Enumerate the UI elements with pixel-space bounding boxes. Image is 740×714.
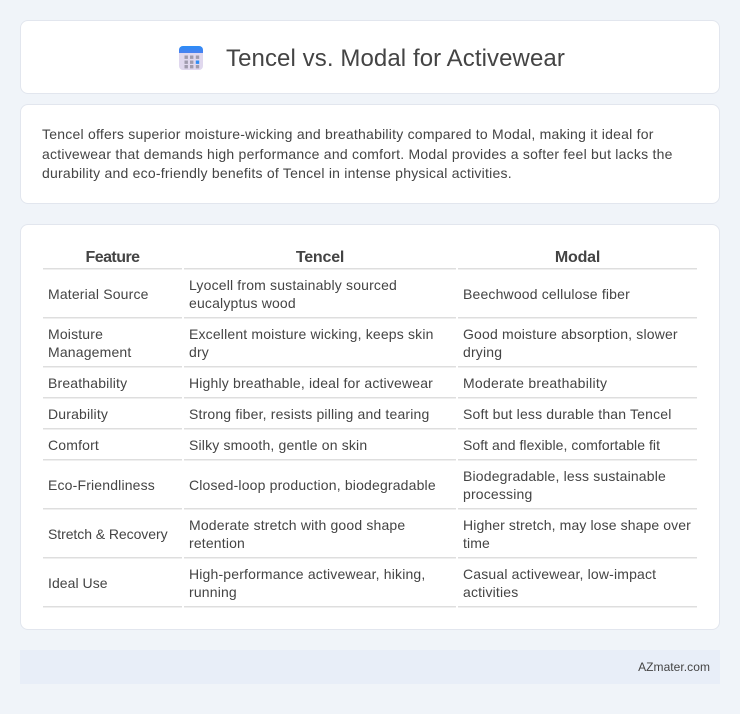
table header bbox=[86, 249, 600, 266]
row: Breathability: Highly breathable, ideal for activewear bbox=[189, 375, 433, 391]
panel: summary bbox=[20, 104, 720, 204]
row: Ideal Use: activities bbox=[463, 584, 518, 600]
row: Comfort bbox=[48, 437, 660, 453]
panel: title card bbox=[20, 20, 720, 94]
row: Material Source: Beechwood cellulose fiber bbox=[463, 286, 630, 302]
row: Breathability bbox=[48, 375, 607, 391]
row: Durability: Soft but less durable than Tencel bbox=[463, 406, 672, 422]
row: Ideal Use: Casual activewear, low-impact bbox=[463, 566, 656, 582]
row: Breathability: Moderate breathability bbox=[463, 375, 607, 391]
row: Durability: Strong fiber, resists pilling and tearing bbox=[189, 406, 429, 422]
row: Eco-Friendliness: Biodegradable, less sustainable bbox=[463, 468, 666, 484]
row: Ideal Use: High-performance activewear, hiking, bbox=[189, 566, 425, 582]
table header: Tencel bbox=[296, 249, 344, 266]
summary text bbox=[42, 126, 673, 181]
footer bar bbox=[20, 650, 720, 684]
row: Comfort: Silky smooth, gentle on skin bbox=[189, 437, 367, 453]
row: Ideal Use: running bbox=[189, 584, 237, 600]
icon: calendar bbox=[179, 46, 203, 70]
row: Moisture Management: Good moisture absorption, slower bbox=[463, 326, 678, 342]
row: Stretch & Recovery bbox=[48, 517, 691, 551]
row: Moisture Management bbox=[48, 326, 678, 360]
summary text: Tencel offers superior moisture-wicking and breathability compared to Modal, making it ideal for bbox=[42, 126, 654, 142]
row: Durability: Durability bbox=[48, 406, 108, 422]
footer credit: AZmater.com bbox=[638, 660, 710, 674]
row: Eco-Friendliness: Eco-Friendliness bbox=[48, 477, 155, 493]
row: Stretch & Recovery: Higher stretch, may lose shape over bbox=[463, 517, 691, 533]
row: Stretch & Recovery: time bbox=[463, 535, 490, 551]
row: Moisture Management: Moisture bbox=[48, 326, 103, 342]
row: Material Source: eucalyptus wood bbox=[189, 295, 296, 311]
row: Moisture Management: Excellent moisture wicking, keeps skin bbox=[189, 326, 434, 342]
summary text: activewear that demands high performance and comfort. Modal provides a softer feel but lacks the bbox=[42, 146, 673, 162]
row: Eco-Friendliness: Closed-loop production, biodegradable bbox=[189, 477, 436, 493]
row: Stretch & Recovery: retention bbox=[189, 535, 245, 551]
row: Durability bbox=[48, 406, 672, 422]
panel: comparison table bbox=[20, 224, 720, 630]
row: Moisture Management: dry bbox=[189, 344, 209, 360]
row: Moisture Management: drying bbox=[463, 344, 502, 360]
row: Comfort: Comfort bbox=[48, 437, 99, 453]
row: Comfort: Soft and flexible, comfortable fit bbox=[463, 437, 660, 453]
row: Stretch & Recovery: Stretch & Recovery bbox=[48, 526, 168, 542]
row: Stretch & Recovery: Moderate stretch with good shape bbox=[189, 517, 405, 533]
row: Breathability: Breathability bbox=[48, 375, 127, 391]
row: Eco-Friendliness: processing bbox=[463, 486, 532, 502]
row: Material Source: Material Source bbox=[48, 286, 149, 302]
summary text: durability and eco-friendly benefits of Tencel in intense physical activities. bbox=[42, 165, 512, 181]
row: Ideal Use: Ideal Use bbox=[48, 575, 108, 591]
row: Material Source bbox=[48, 277, 630, 311]
row: Material Source: Lyocell from sustainably sourced bbox=[189, 277, 397, 293]
row: Eco-Friendliness bbox=[48, 468, 666, 502]
table header: Feature bbox=[86, 249, 139, 266]
row: Moisture Management: Management bbox=[48, 344, 131, 360]
row: Ideal Use bbox=[48, 566, 656, 600]
title: Tencel vs. Modal for Activewear bbox=[226, 45, 565, 72]
table header: Modal bbox=[555, 249, 600, 266]
